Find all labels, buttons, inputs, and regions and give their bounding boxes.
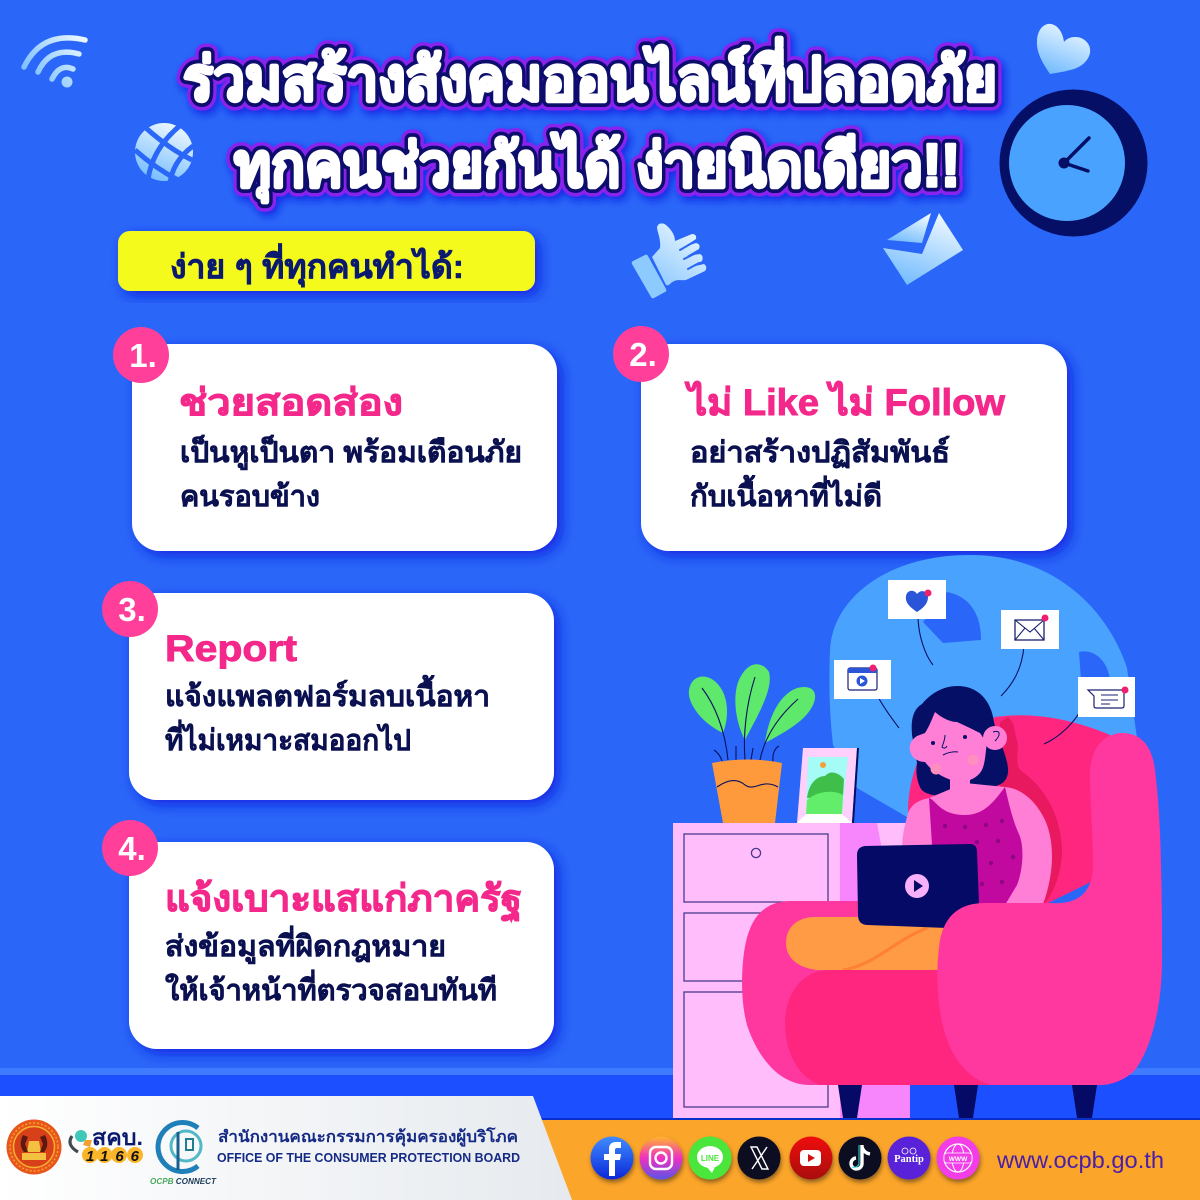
icon: line	[688, 1136, 732, 1180]
title: ทุกคนช่วยกันได้ ง่ายนิดเดียว!!	[234, 130, 960, 203]
picture frame	[797, 748, 859, 823]
panel: step 2: ไม่ Like ไม่ Follow	[684, 380, 1005, 423]
chair seam	[1000, 717, 1062, 907]
panel: step 1: ช่วยสอดส่อง	[179, 382, 403, 423]
panel: step 3: 3.	[118, 591, 146, 628]
footer: white logo panel	[0, 1096, 572, 1200]
organisation name	[217, 1126, 520, 1165]
icon: thumbs up	[632, 223, 706, 298]
panel: step 2: 2.	[629, 336, 657, 373]
icon: pantip	[888, 1136, 930, 1180]
panel: step 1: 1.	[129, 337, 157, 374]
panel: step 2	[613, 326, 1067, 551]
panel: step 4: 4.	[118, 830, 146, 867]
footer: orange band	[530, 1120, 1200, 1200]
icon: instagram	[640, 1136, 682, 1180]
logo: hotline 1166: สคบ.	[92, 1125, 143, 1150]
panel: step 4: ให้เจ้าหน้าที่ตรวจสอบทันที	[165, 969, 497, 1007]
logo: hotline 1166: 1166	[86, 1148, 140, 1165]
thought blob	[829, 555, 1138, 817]
icon: clock	[1000, 90, 1148, 236]
notification: heart	[888, 580, 946, 619]
website url: www.ocpb.go.th	[996, 1147, 1164, 1173]
icon: facebook	[590, 1136, 634, 1180]
icon: website	[936, 1136, 980, 1180]
logo: OCPB connect: OCPB CONNECT	[150, 1176, 217, 1186]
logo: government seal	[6, 1120, 62, 1174]
armchair arm and seat	[742, 733, 1162, 1085]
icon: x	[738, 1136, 780, 1180]
yellow heading pill: ง่าย ๆ ที่ทุกคนทำได้:	[170, 243, 464, 288]
panel: step 1: คนรอบข้าง	[180, 481, 320, 513]
panel: step 2: กับเนื้อหาที่ไม่ดี	[690, 474, 882, 513]
icon: envelope	[883, 213, 963, 285]
icon: website: WWW	[949, 1156, 968, 1163]
notification: message	[1078, 677, 1135, 717]
illustration: woman on armchair	[673, 555, 1162, 1118]
title: ทุกคนช่วยกันได้ ง่ายนิดเดียว!!	[234, 130, 960, 203]
logo: hotline 1166	[70, 1125, 143, 1165]
armchair back	[908, 715, 1110, 907]
organisation name: OFFICE OF THE CONSUMER PROTECTION BOARD	[217, 1151, 520, 1165]
icon: heart	[1037, 24, 1090, 74]
laptop	[857, 844, 979, 928]
panel: step 4	[102, 820, 554, 1049]
panel: step 2: อย่าสร้างปฏิสัมพันธ์	[690, 435, 950, 469]
title: ร่วมสร้างสังคมออนไลน์ที่ปลอดภัย	[183, 37, 997, 113]
panel: step 3	[102, 581, 554, 800]
potted plant	[689, 664, 815, 823]
panel: step 1	[113, 327, 557, 551]
icon: globe	[135, 123, 193, 184]
panel: step 3: แจ้งแพลตฟอร์มลบเนื้อหา	[165, 674, 490, 713]
title	[183, 37, 997, 203]
icon: youtube	[790, 1136, 832, 1180]
notification: video	[834, 660, 891, 699]
title: ร่วมสร้างสังคมออนไลน์ที่ปลอดภัย	[183, 37, 997, 113]
panel: step 4: แจ้งเบาะแสแก่ภาครัฐ	[165, 878, 522, 922]
title: ร่วมสร้างสังคมออนไลน์ที่ปลอดภัย	[183, 37, 997, 113]
icon: pantip: Pantip	[894, 1154, 924, 1165]
panel: step 4: ส่งข้อมูลที่ผิดกฎหมาย	[165, 925, 446, 964]
logo: OCPB connect	[150, 1122, 217, 1186]
panel: step 1: เป็นหูเป็นตา พร้อมเตือนภัย	[180, 434, 522, 470]
chair legs	[838, 1085, 1097, 1118]
social icons	[590, 1136, 980, 1180]
icon: tiktok	[838, 1136, 882, 1180]
connector lines	[877, 615, 1082, 744]
panel: step 3: ที่ไม่เหมาะสมออกไป	[165, 719, 411, 757]
woman	[902, 686, 1052, 907]
title: ทุกคนช่วยกันได้ ง่ายนิดเดียว!!	[234, 130, 960, 203]
panel: step 3: Report	[165, 628, 297, 669]
notification: mail	[1001, 610, 1059, 649]
organisation name: สำนักงานคณะกรรมการคุ้มครองผู้บริโภค	[218, 1126, 518, 1148]
cabinet	[673, 823, 910, 1118]
icon: wifi	[24, 38, 85, 88]
icon: line: LINE	[701, 1154, 720, 1163]
yellow heading pill	[118, 231, 535, 291]
